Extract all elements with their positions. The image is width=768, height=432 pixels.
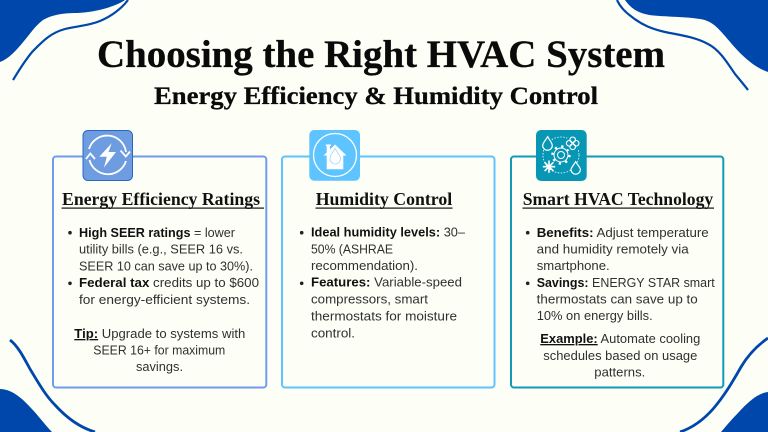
bullet list: [68, 225, 259, 307]
tip: savings.: [136, 359, 183, 374]
heading: Energy Efficiency Ratings: [62, 189, 260, 209]
example: schedules based on usage: [543, 348, 697, 363]
bullet list: control.: [311, 325, 355, 340]
corner wave: top right: [617, 0, 768, 90]
bullet list: compressors, smart: [311, 291, 428, 306]
title: Choosing the Right HVAC System: [97, 33, 665, 76]
panel: energy efficiency ratings: [53, 130, 266, 388]
bullet list: thermostats can save up to: [537, 292, 698, 306]
bullet list: thermostats for moisture: [311, 309, 457, 324]
bullet list: Federal tax credits up to $600: [79, 275, 259, 290]
bullet list: Savings: ENERGY STAR smart: [537, 275, 715, 290]
example: Example: Automate cooling: [540, 331, 700, 346]
example: patterns.: [594, 365, 645, 380]
panel: smart hvac technology: [511, 130, 723, 388]
bullet list: 10% on energy bills.: [537, 308, 653, 323]
icon: energy cycle bolt: [83, 130, 132, 180]
bullet list: SEER 10 can save up to 30%).: [79, 258, 253, 274]
tip: [74, 326, 245, 374]
bullet list: and humidity remotely via: [537, 242, 689, 256]
example: [540, 331, 700, 380]
corner wave: bottom right: [680, 338, 768, 432]
panel: humidity control: [282, 130, 494, 388]
icon: gear with climate symbols: [536, 130, 587, 181]
heading: Humidity Control: [316, 189, 452, 209]
corner wave: top left: [0, 0, 128, 80]
bullet list: utility bills (e.g., SEER 16 vs.: [79, 242, 243, 257]
corner wave: bottom left: [0, 340, 95, 432]
bullet list: [300, 225, 466, 340]
tip: SEER 16+ for maximum: [93, 342, 225, 358]
bullet list: smartphone.: [537, 258, 610, 273]
subtitle: Energy Efficiency & Humidity Control: [154, 81, 598, 110]
bullet list: High SEER ratings = lower: [79, 225, 236, 240]
bullet list: recommendation).: [311, 258, 418, 273]
bullet list: [526, 225, 715, 323]
bullet list: for energy-efficient systems.: [79, 292, 250, 307]
tip: Tip: Upgrade to systems with: [74, 326, 245, 341]
bullet list: Ideal humidity levels: 30–: [311, 225, 466, 240]
bullet list: Features: Variable-speed: [311, 275, 462, 290]
icon: house with droplet: [309, 130, 360, 181]
heading: Smart HVAC Technology: [523, 189, 713, 209]
bullet list: Benefits: Adjust temperature: [537, 225, 709, 240]
bullet list: 50% (ASHRAE: [311, 241, 393, 256]
